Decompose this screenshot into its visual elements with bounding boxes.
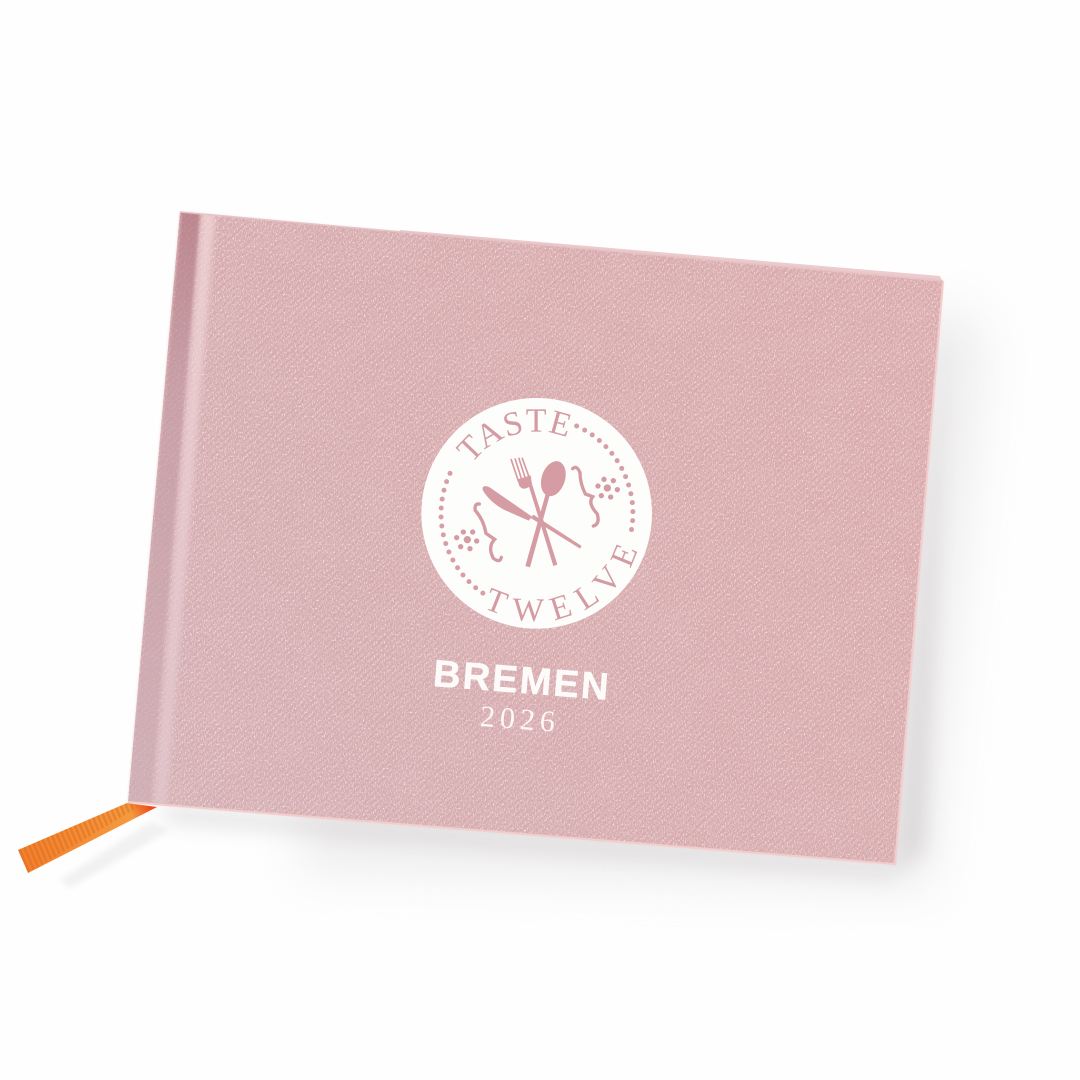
icon: fork bbox=[511, 458, 557, 566]
orange ribbon bookmark bbox=[18, 803, 157, 873]
book bbox=[128, 205, 943, 864]
soft shadow under book bbox=[60, 300, 985, 890]
curved text: TWELVE: TWELVE bbox=[488, 544, 638, 622]
icon: right flourish with berries bbox=[573, 467, 620, 526]
icon: crossed cutlery bbox=[483, 458, 582, 567]
top edge highlight bbox=[180, 212, 943, 281]
product photo scene bbox=[18, 211, 986, 896]
icon: spoon bbox=[525, 458, 570, 567]
icon: left flourish with berries bbox=[454, 504, 501, 561]
white circle bbox=[421, 398, 652, 629]
Taste Twelve emblem bbox=[421, 398, 652, 629]
icon: knife bbox=[483, 486, 582, 549]
linen texture bbox=[128, 212, 943, 864]
year: 2026: 2026 bbox=[479, 700, 561, 739]
spine hinge bbox=[128, 205, 216, 810]
dotted ring bbox=[441, 426, 633, 596]
curved text: TASTE: TASTE bbox=[456, 409, 570, 460]
title: BREMEN: BREMEN bbox=[432, 653, 612, 709]
pale bottom and right edges bbox=[128, 281, 943, 864]
page block peeking at top right bbox=[400, 230, 943, 283]
cover bbox=[128, 212, 943, 864]
